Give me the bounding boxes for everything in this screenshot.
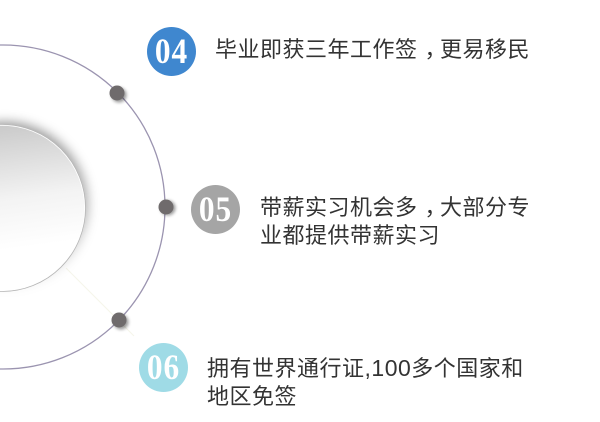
text 06: 地区免签 [207,384,297,409]
text 05: 带薪实习机会多 ，大部分专 [260,195,530,220]
ring node bottom [112,312,128,330]
badge 06: 06 [147,349,180,387]
ring node top [110,86,126,102]
text 05 [260,195,530,248]
badge 05: 05 [199,191,232,229]
outer ring [0,45,165,369]
connector line [66,268,134,336]
text 04: 毕业即获三年工作签 ，更易移民 [215,37,530,62]
text 06: 拥有世界通行证,100多个国家和 [207,355,524,381]
badge 06 [139,343,188,392]
text 06 [207,355,524,409]
badge 05 [191,185,240,234]
text 05: 业都提供带薪实习 [260,223,440,248]
ring node middle [158,200,176,216]
badge 04 [147,27,196,76]
badge 04: 04 [155,33,188,71]
inner disc [0,122,88,292]
